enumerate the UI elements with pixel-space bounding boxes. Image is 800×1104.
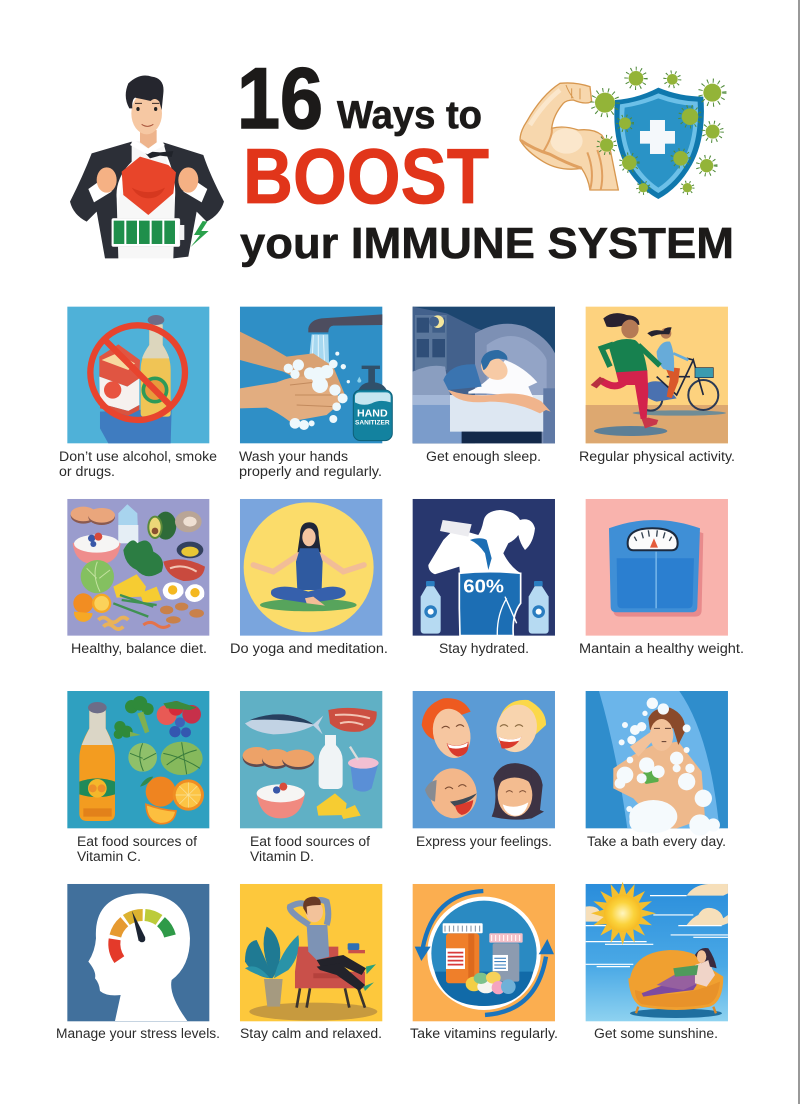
caption: wash hands [239, 449, 382, 479]
panel: sunshine [586, 882, 728, 1021]
panel: hydrated: 60% [463, 575, 504, 596]
caption: vitamin D [250, 834, 370, 864]
panel: physical activity [586, 307, 728, 443]
caption: alcohol: Don’t use alcohol, smoke [59, 449, 217, 464]
caption: wash hands: Wash your hands [239, 449, 348, 464]
icon: shield with cross [614, 88, 704, 199]
caption: calm: Stay calm and relaxed. [240, 1026, 382, 1041]
caption: yoga: Do yoga and meditation. [230, 641, 388, 656]
caption: alcohol [59, 449, 217, 479]
caption: alcohol: or drugs. [59, 464, 115, 479]
panel: stress [67, 884, 209, 1021]
panel: calm and relaxed [240, 884, 382, 1021]
panel: wash hands: HAND [357, 409, 388, 420]
caption: wash hands: properly and regularly. [239, 464, 382, 479]
caption: vitamin D: Eat food sources of [250, 834, 370, 849]
panel: hydrated [413, 499, 555, 636]
icon: flexed arm [520, 83, 618, 190]
panel: express feelings [413, 691, 555, 828]
title: Ways to [337, 94, 482, 137]
caption: vitamin C [77, 834, 197, 864]
panel: healthy diet [67, 499, 209, 636]
caption: vitamins: Take vitamins regularly. [410, 1026, 558, 1041]
caption: sunshine: Get some sunshine. [594, 1026, 718, 1041]
title: your IMMUNE SYSTEM [240, 219, 734, 268]
panel: vitamin D foods [240, 691, 382, 828]
caption: bath: Take a bath every day. [587, 834, 726, 849]
panel: vitamins [413, 884, 555, 1021]
panel: bath [586, 691, 728, 836]
icon: viruses [592, 69, 724, 194]
title: 16 [237, 51, 323, 147]
caption: hydrated: Stay hydrated. [439, 641, 529, 656]
panel: vitamin C foods [67, 691, 209, 828]
caption: vitamin C: Vitamin C. [77, 849, 141, 864]
caption: weight: Mantain a healthy weight. [579, 641, 744, 656]
caption: vitamin D: Vitamin D. [250, 849, 314, 864]
icon: businessman opening shirt [70, 75, 224, 258]
title [237, 51, 734, 268]
caption: diet: Healthy, balance diet. [71, 641, 207, 656]
panel: wash hands [240, 307, 392, 443]
caption: feelings: Express your feelings. [416, 834, 552, 849]
panel: healthy weight [586, 499, 728, 636]
caption: activity: Regular physical activity. [579, 449, 735, 464]
caption: vitamin C: Eat food sources of [77, 834, 197, 849]
panel: sleep [413, 307, 555, 443]
title: BOOST [243, 132, 489, 220]
caption: stress: Manage your stress levels. [56, 1026, 220, 1041]
panel: wash hands: SANITIZER [355, 420, 390, 427]
panel: yoga [240, 499, 382, 636]
panel: no alcohol, smoke or drugs [67, 307, 209, 443]
caption: sleep: Get enough sleep. [426, 449, 541, 464]
